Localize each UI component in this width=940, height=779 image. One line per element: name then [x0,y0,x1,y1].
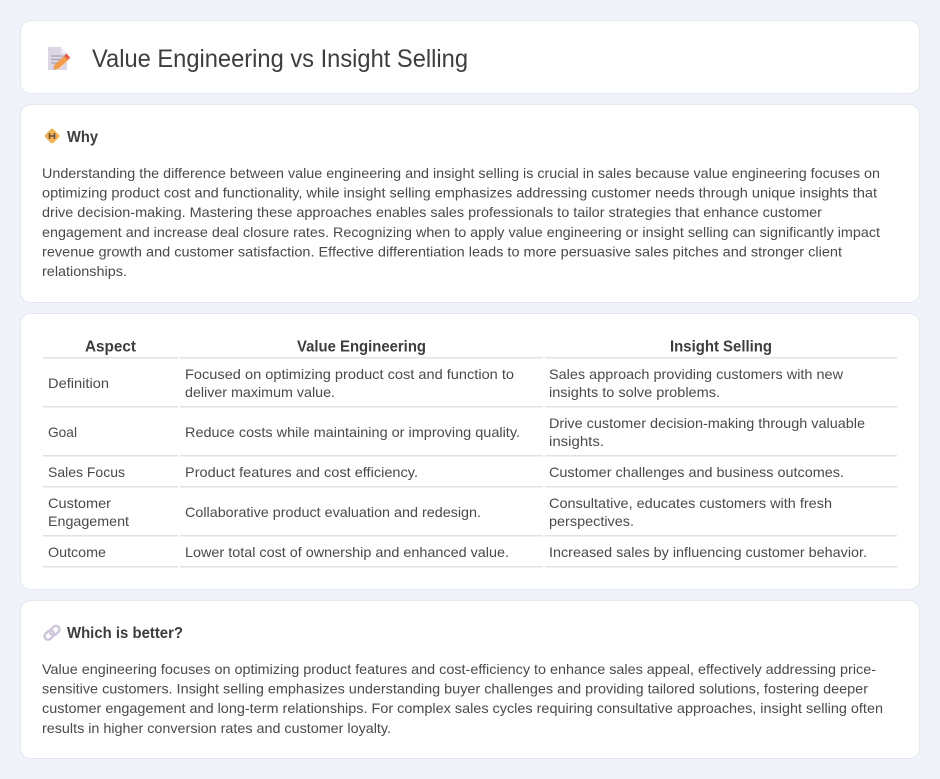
text block: which is better [42,661,883,736]
text block: which is better: sensitive customers. Insight selling emphasizes understanding buyer challenges and providing tailored solutions, fostering deeper [42,681,868,697]
row: customer engagement [48,495,832,529]
row: customer engagement: Collaborative product evaluation and redesign. [185,504,481,520]
table header row: Value Engineering [297,338,426,356]
row: goal [48,415,865,449]
row: definition: Focused on optimizing product cost and function to [185,366,514,382]
row: sales focus [48,464,844,480]
text block: which is better: Value engineering focuses on optimizing product features and cost-efficiency to enhance sales appeal, effectively addressing price- [42,661,876,677]
table header row: Aspect [85,338,137,356]
row: definition: insights to solve problems. [549,384,720,400]
text block: why: optimizing product cost and functionality, while insight selling emphasizes addressing customer needs through unique insights that [42,185,877,201]
row: definition: Sales approach providing customers with new [549,366,844,382]
row: definition: Definition [48,375,109,391]
text block: why: Understanding the difference between value engineering and insight selling is crucial in sales because value engineering focuses on [42,165,880,181]
row: outcome: Increased sales by influencing customer behavior. [549,544,867,560]
row: outcome: Lower total cost of ownership and enhanced value. [185,544,509,560]
heading: why: Why [67,129,98,146]
row: customer engagement: Engagement [48,513,129,529]
text block: why: engagement and increase deal closure rates. Recognizing when to apply value engineering or insight selling can significantly impact [42,224,880,240]
icon: link [43,624,61,641]
panel: comparison table [20,314,920,590]
panel: which is better [20,600,920,758]
text block: why [42,165,880,279]
table header row [85,338,772,356]
row: goal: insights. [549,433,604,449]
header panel [20,20,920,94]
row: customer engagement: Consultative, educates customers with fresh [549,495,832,511]
row: sales focus: Product features and cost efficiency. [185,464,418,480]
text block: why: drive decision-making. Mastering these approaches enables sales professionals to tailor strategies that enhance customer [42,204,822,220]
row: goal: Goal [48,424,77,440]
row: definition: deliver maximum value. [185,384,335,400]
icon: warning diamond [44,128,60,144]
text block: which is better: customer engagement and long-term relationships. For complex sales cycles requiring consultative approaches, insight selling often [42,700,883,716]
row: sales focus: Sales Focus [48,464,125,480]
heading: which is better: Which is better? [67,625,183,642]
row: goal: Reduce costs while maintaining or improving quality. [185,424,520,440]
table rules [43,357,897,568]
icon: memo with pencil [48,47,70,70]
panel: why [20,104,920,302]
row: customer engagement: perspectives. [549,513,634,529]
row: goal: Drive customer decision-making through valuable [549,415,865,431]
row: sales focus: Customer challenges and business outcomes. [549,464,844,480]
row: outcome [48,544,867,560]
row: outcome: Outcome [48,544,106,560]
row: definition [48,366,844,400]
row: customer engagement: Customer [48,495,111,511]
text block: which is better: results in higher conversion rates and customer loyalty. [42,720,391,736]
text block: why: relationships. [42,263,127,279]
table header row: Insight Selling [670,338,772,356]
title: Value Engineering vs Insight Selling [92,45,468,73]
text block: why: revenue growth and customer satisfaction. Effective differentiation leads to more persuasive sales pitches and stronger client [42,243,842,259]
